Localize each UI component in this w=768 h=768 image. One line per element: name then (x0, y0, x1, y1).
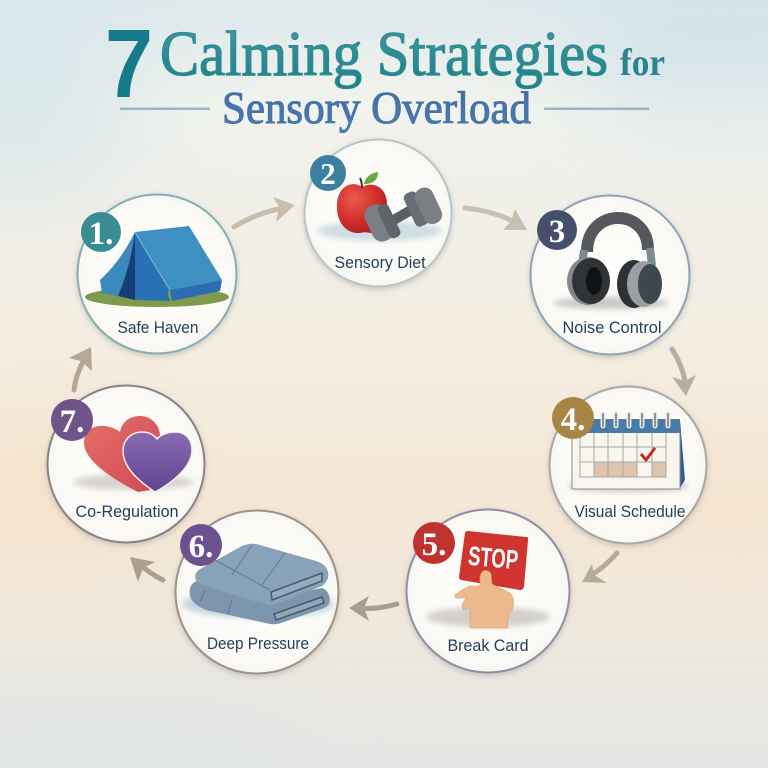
arrows (69, 197, 696, 621)
title line one: Calming Strategies (160, 18, 608, 89)
lower layer (190, 581, 330, 624)
badge 6 (180, 524, 222, 566)
icon: apple and dumbbell (318, 172, 445, 245)
icon: weighted blanket (182, 544, 334, 624)
panel: 5 break card (406, 510, 570, 672)
badge 1 (81, 212, 121, 252)
panel: 6 deep pressure (176, 510, 338, 674)
panel: 3 noise control (530, 196, 690, 354)
title (105, 9, 665, 133)
icon: two hearts (73, 416, 193, 492)
upper layer (195, 544, 328, 605)
label: Visual Schedule (574, 502, 686, 521)
title numeral 7: 7 (105, 9, 153, 118)
panel: 4 visual schedule (550, 386, 706, 544)
icon: tent (85, 226, 229, 307)
arrow 5 to 6 (349, 596, 397, 621)
badge 3 (537, 210, 577, 250)
label: Sensory Diet (334, 253, 426, 272)
badge 4 (552, 397, 594, 439)
badge 5: 5. (422, 527, 446, 563)
dumbbell (361, 185, 445, 245)
panel: 1 safe haven (78, 194, 236, 354)
icon: stop card and hand (426, 531, 550, 628)
arrow 3 to 4 (672, 349, 696, 396)
icon: calendar (568, 414, 688, 492)
badge 6: 6. (189, 529, 213, 565)
badge 1: 1. (89, 216, 113, 252)
title word for: for (620, 42, 665, 84)
icon: stop card and hand: STOP (467, 541, 519, 575)
badge 7 (51, 399, 93, 441)
arrow 4 to 5 (582, 553, 617, 583)
title line two: Sensory Overload (222, 83, 531, 133)
badge 7: 7. (60, 404, 84, 440)
icon: headphones (553, 218, 669, 309)
badge 4: 4. (561, 402, 585, 438)
label: Deep Pressure (207, 634, 309, 653)
badge 5 (413, 522, 455, 564)
badge 2: 2 (320, 156, 336, 191)
label: Break Card (448, 636, 528, 655)
label: Noise Control (562, 318, 662, 337)
arrow 2 to 3 (465, 208, 527, 230)
arrow 1 to 2 (234, 197, 295, 227)
panel: 7 co-regulation (48, 386, 204, 542)
badge 2 (310, 155, 346, 191)
label: Co-Regulation (76, 502, 178, 521)
arrow 6 to 7 (130, 557, 163, 582)
badge 3: 3 (549, 214, 565, 250)
arrow 7 to 1 (69, 347, 92, 390)
label: Safe Haven (118, 318, 198, 337)
panel: 2 sensory diet (304, 140, 452, 286)
